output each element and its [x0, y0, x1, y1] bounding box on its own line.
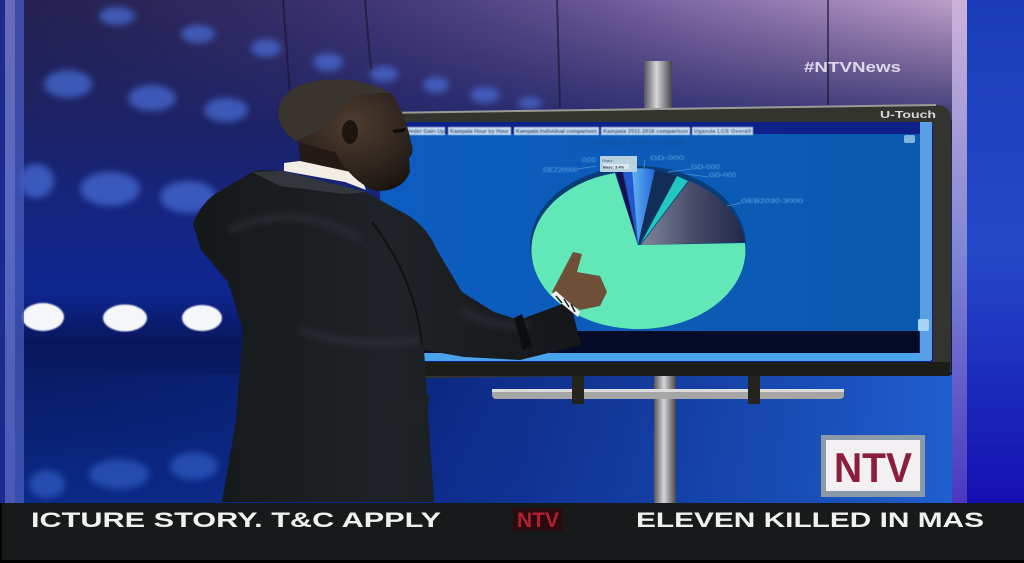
pie labels and tooltip: GD-000	[709, 173, 737, 179]
ticker text right: ELEVEN KILLED IN MAS	[636, 509, 984, 532]
background light dots	[18, 7, 542, 498]
slice: light blue	[632, 168, 655, 245]
screen tabs: Kampala Hour by Hour	[450, 129, 510, 135]
shirt collar	[284, 161, 366, 190]
screen tabs	[404, 127, 753, 135]
ticker logo: NTV	[517, 509, 559, 532]
screen tabs: Uganda LCS Overall	[694, 129, 751, 135]
striped cuff	[551, 291, 580, 317]
slice: thin dark	[616, 171, 638, 245]
brand label: U-Touch	[880, 110, 936, 121]
pie labels and tooltip: GD-000	[650, 156, 685, 162]
pie labels and tooltip: GEB2030-3000	[741, 199, 804, 205]
news ticker bar	[0, 503, 1024, 563]
tooltip: Base: 3.4%	[603, 164, 625, 170]
screen tabs: Kampala 2011-2016 comparison	[603, 129, 689, 135]
head	[278, 80, 413, 191]
tooltip	[600, 156, 637, 172]
pie chart	[530, 166, 746, 329]
pie labels and tooltip	[543, 156, 804, 206]
neck	[298, 128, 382, 188]
pie labels and tooltip: GD-000	[691, 165, 721, 171]
presenter	[193, 80, 607, 502]
slice: navy	[638, 170, 677, 245]
slice: gray	[641, 181, 745, 245]
screen tabs: Under Gain Up	[406, 129, 445, 135]
suit body and arm	[193, 170, 581, 502]
NTV logo: NTV	[834, 444, 912, 491]
pie labels and tooltip: GDD	[582, 158, 597, 164]
slice: teal	[640, 176, 688, 245]
touch screen monitor	[380, 105, 951, 378]
monitor stand pole	[644, 61, 676, 503]
hand	[552, 252, 607, 310]
chart title: LCS District Share - Overall	[581, 138, 685, 147]
slice: large green	[531, 173, 745, 329]
screen tabs: Kampala Individual comparison	[516, 129, 598, 135]
tooltip: Share	[602, 158, 613, 163]
pie labels and tooltip: GEZ20000	[543, 168, 579, 174]
ticker text left: ICTURE STORY. T&C APPLY	[31, 509, 441, 532]
stand crossbar	[492, 376, 844, 404]
slice: blue	[623, 169, 638, 245]
screen	[380, 122, 933, 362]
hashtag: #NTVNews	[804, 59, 901, 76]
NTV logo	[821, 435, 925, 497]
